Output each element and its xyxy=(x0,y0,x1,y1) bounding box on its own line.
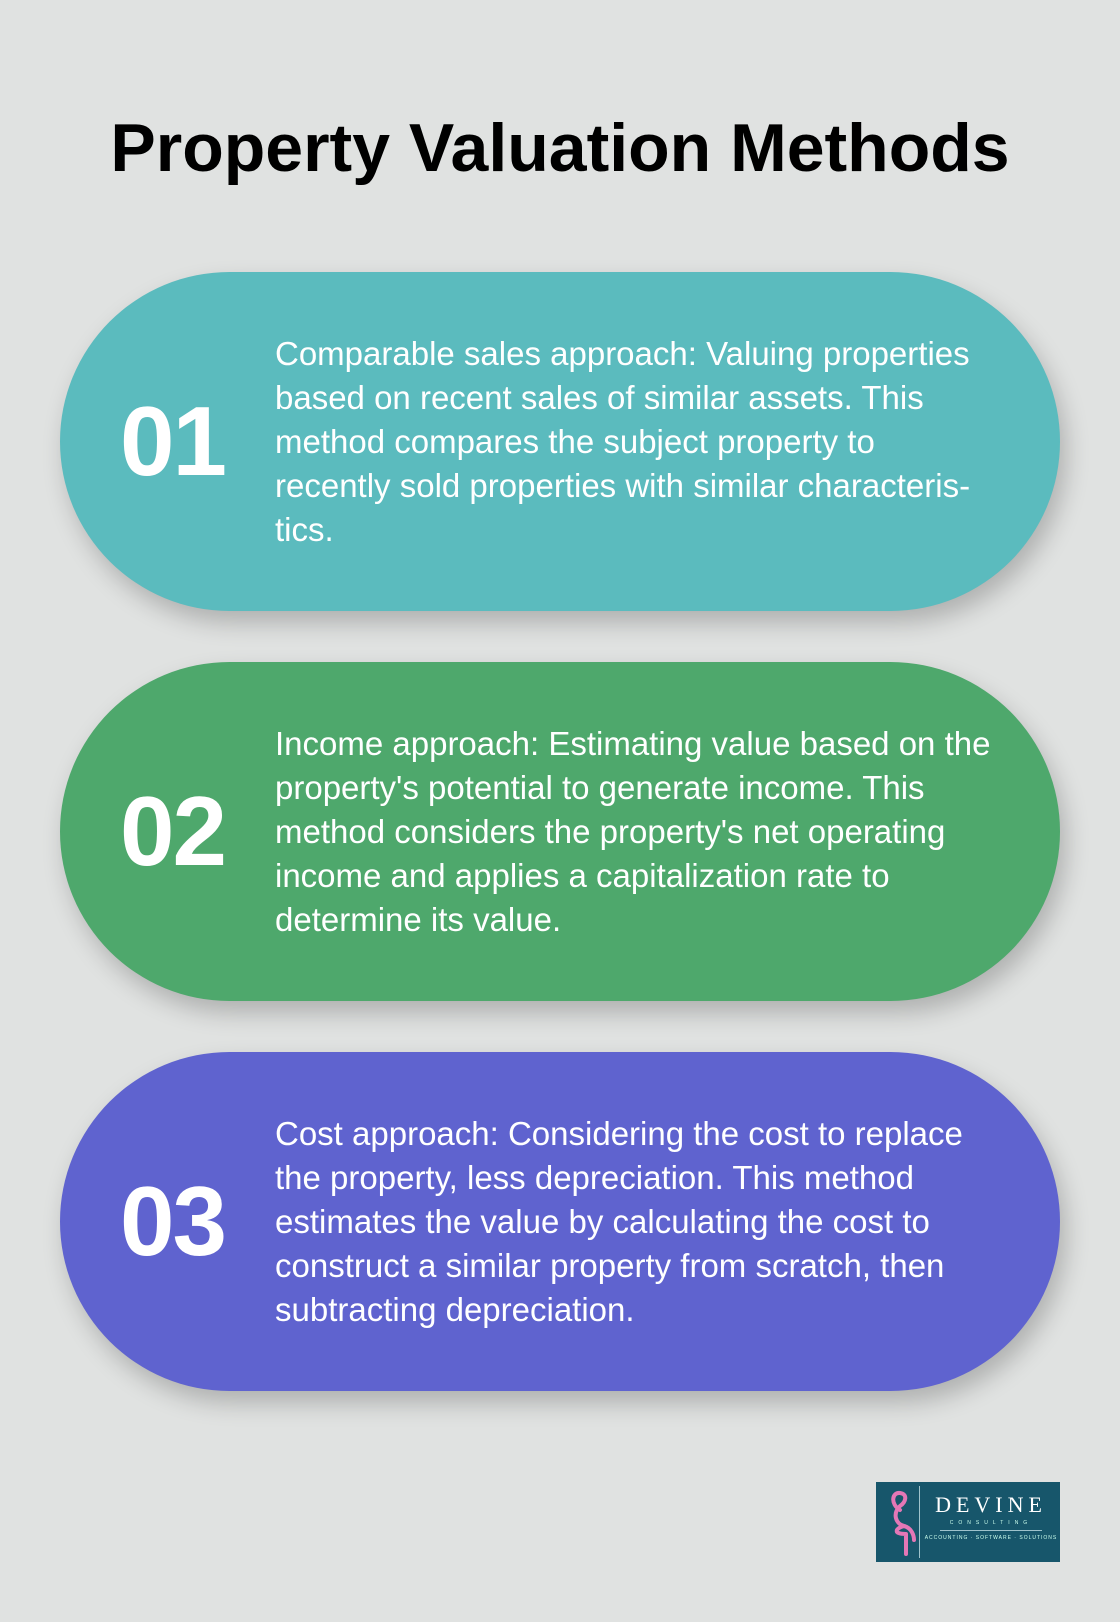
text 03: Cost approach: Considering the cost to replace the property, less depreciation. This method estimates the value by calculating the cost to construct a similar property from scratch, then subtracting depreciation. xyxy=(275,1114,963,1328)
number 03: 03 xyxy=(120,1166,225,1276)
logo: DEVINE xyxy=(935,1492,1047,1517)
number 01: 01 xyxy=(120,386,225,496)
icon: flamingo xyxy=(891,1490,916,1556)
panel: 01 comparable sales xyxy=(60,272,1060,611)
panel: 02 income xyxy=(60,662,1060,1001)
logo xyxy=(876,1482,1060,1562)
number 02: 02 xyxy=(120,776,225,886)
text 02: Income approach: Estimating value based on the property's potential to generate income. This method considers the property's net operating income and applies a capitalization rate to determine its value. xyxy=(275,724,990,938)
logo: CONSULTING xyxy=(950,1520,1032,1526)
logo: ACCOUNTING · SOFTWARE · SOLUTIONS xyxy=(925,1535,1057,1541)
title: Property Valuation Methods xyxy=(110,110,1010,186)
text 01: Comparable sales approach: Valuing properties based on recent sales of similar assets. This method compares the subject property to recently sold properties with similar characteris-tics. xyxy=(275,334,970,548)
panel: 03 cost xyxy=(60,1052,1060,1391)
